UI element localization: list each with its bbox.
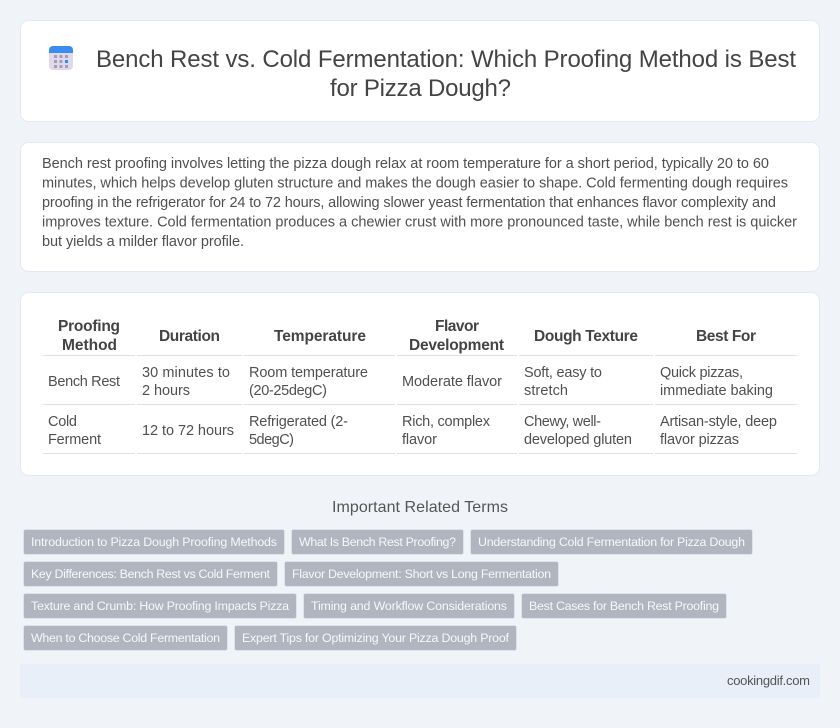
table row: bench rest: 2 hours bbox=[142, 383, 190, 399]
table row: bench rest: Room temperature bbox=[249, 365, 368, 381]
footer bbox=[20, 664, 820, 698]
related term tags: Flavor Development: Short vs Long Fermentation bbox=[292, 567, 551, 581]
table row: cold ferment: 5degC) bbox=[249, 432, 294, 448]
table row: bench rest: Bench Rest bbox=[48, 374, 120, 390]
table row: cold ferment: flavor pizzas bbox=[660, 432, 739, 448]
table row: bench rest: 30 minutes to bbox=[142, 365, 230, 381]
related term tags: Introduction to Pizza Dough Proofing Methods bbox=[31, 535, 277, 549]
table row: bench rest: (20-25degC) bbox=[249, 383, 327, 399]
related term tags: When to Choose Cold Fermentation bbox=[31, 631, 220, 645]
title: Bench Rest vs. Cold Fermentation: Which Proofing Method is Best bbox=[96, 46, 796, 73]
table row: cold ferment: Chewy, well- bbox=[524, 414, 601, 430]
title bbox=[96, 46, 796, 102]
panel: description text: but yields a milder flavor profile. bbox=[42, 234, 244, 250]
title: for Pizza Dough? bbox=[330, 75, 511, 102]
related term tags: Understanding Cold Fermentation for Pizza Dough bbox=[478, 535, 745, 549]
table header row: Method bbox=[62, 337, 117, 354]
related term tags: What Is Bench Rest Proofing? bbox=[299, 535, 456, 549]
table header row: Proofing bbox=[58, 318, 120, 335]
related term tags bbox=[24, 530, 752, 650]
table header row: Flavor bbox=[435, 318, 479, 335]
panel: comparison table bbox=[20, 292, 820, 476]
table row: cold ferment: developed gluten bbox=[524, 432, 632, 448]
heading: important related terms: Important Related Terms bbox=[332, 499, 508, 516]
related term tags: Best Cases for Bench Rest Proofing bbox=[529, 599, 719, 613]
table row: cold ferment: flavor bbox=[402, 432, 437, 448]
related term tags: Expert Tips for Optimizing Your Pizza Dough Proof bbox=[242, 631, 510, 645]
footer: cookingdif.com bbox=[727, 673, 810, 688]
table header row: Dough Texture bbox=[534, 328, 638, 345]
table row: bench rest: Soft, easy to bbox=[524, 365, 602, 381]
table row: bench rest: Quick pizzas, bbox=[660, 365, 743, 381]
panel: title header bbox=[20, 20, 820, 122]
table header row: Temperature bbox=[274, 328, 366, 345]
related term tags: Timing and Workflow Considerations bbox=[311, 599, 507, 613]
table header row: Development bbox=[409, 337, 504, 354]
panel: description text: improves texture. Cold fermentation produces a chewier crust with more pronounced taste, while bench rest is quicker bbox=[42, 214, 797, 230]
icon: calendar bbox=[49, 46, 73, 70]
related term tags: Texture and Crumb: How Proofing Impacts Pizza bbox=[31, 599, 289, 613]
table row: cold ferment: Cold bbox=[48, 414, 77, 430]
table row: bench rest: Moderate flavor bbox=[402, 374, 502, 390]
related term tags: Key Differences: Bench Rest vs Cold Ferment bbox=[31, 567, 271, 581]
table row: cold ferment bbox=[48, 414, 777, 448]
table row: cold ferment: Artisan-style, deep bbox=[660, 414, 777, 430]
table header row bbox=[58, 318, 756, 354]
table header row: Best For bbox=[696, 328, 756, 345]
table row: cold ferment: 12 to 72 hours bbox=[142, 423, 234, 439]
panel: description text: minutes, which helps develop gluten structure and makes the dough easier to shape. Cold fermenting dough requires bbox=[42, 176, 788, 192]
table row: cold ferment: Rich, complex bbox=[402, 414, 491, 430]
table row: cold ferment: Ferment bbox=[48, 432, 101, 448]
panel: description text bbox=[20, 142, 820, 272]
panel: description text: Bench rest proofing involves letting the pizza dough relax at room temperature for a short period, typically 20 to 60 bbox=[42, 156, 769, 172]
table row: bench rest: immediate baking bbox=[660, 383, 773, 399]
table row: bench rest: stretch bbox=[524, 383, 568, 399]
table row: cold ferment: Refrigerated (2- bbox=[249, 414, 348, 430]
table header row: Duration bbox=[159, 328, 220, 345]
panel: description text: proofing in the refrigerator for 24 to 72 hours, allowing slower yeast fermentation that enhances flavor complexity and bbox=[42, 195, 776, 211]
table row: bench rest bbox=[48, 365, 773, 399]
